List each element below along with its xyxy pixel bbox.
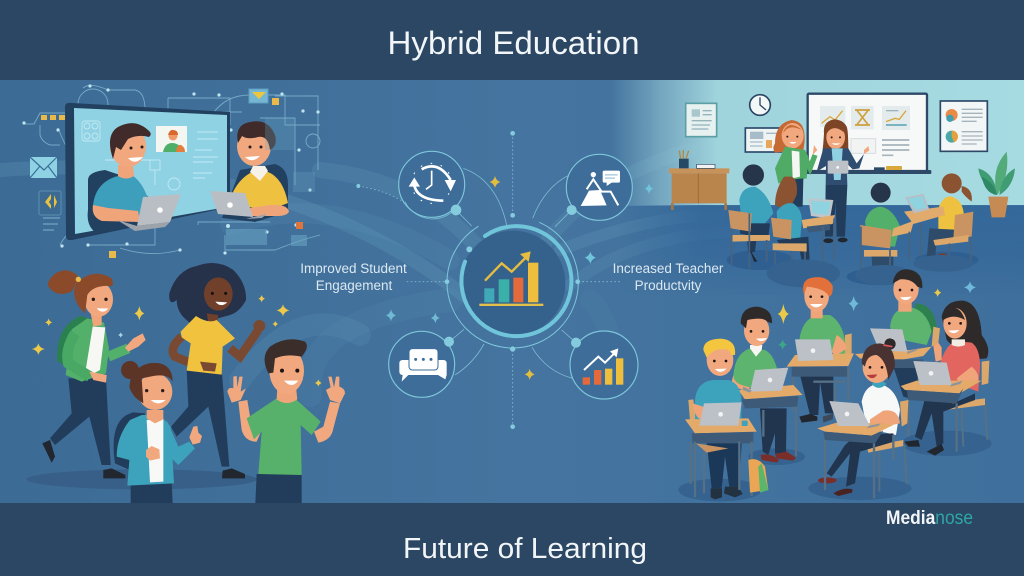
student B, dark hair and polo bbox=[732, 307, 803, 463]
student C, orange hair bbox=[787, 277, 854, 423]
icon: growth chart bbox=[570, 331, 638, 399]
floating UI panels bbox=[226, 118, 315, 246]
student F, long hair in red shirt bbox=[901, 301, 989, 456]
student D, back right with backpack bbox=[855, 269, 940, 400]
circuit decoration bbox=[24, 85, 320, 254]
ground shadow bbox=[26, 469, 257, 489]
teacher with tablet bbox=[817, 119, 869, 243]
icon: yellow message bbox=[249, 89, 268, 103]
wall chart poster bbox=[940, 101, 987, 151]
student at laptop, teal shirt bbox=[88, 123, 181, 232]
whiteboard bbox=[804, 94, 931, 174]
wall clock bbox=[750, 95, 770, 115]
tablet screen bbox=[65, 103, 230, 240]
teacher in green cardigan bbox=[773, 120, 817, 207]
title: Hybrid Education bbox=[388, 25, 640, 61]
background swirl bands bbox=[0, 150, 760, 395]
backpack on floor bbox=[748, 459, 768, 493]
icon: code badge bbox=[39, 191, 61, 230]
panel: classroom bbox=[669, 94, 1015, 285]
panel: central hub bbox=[356, 131, 653, 429]
seated student, teal shirt back view bbox=[727, 164, 793, 270]
label: increased teacher: Increased Teacher bbox=[613, 261, 724, 276]
student: ponytail girl in green jacket bbox=[42, 270, 146, 478]
icon: teacher presenting bbox=[566, 154, 632, 220]
background bbox=[0, 80, 1024, 504]
label: productvity: Productvity bbox=[635, 278, 702, 293]
student E, bun and white shirt bbox=[817, 338, 908, 498]
logo: Medianose: Medianose bbox=[886, 508, 973, 529]
hub outer ring bbox=[447, 217, 578, 348]
classroom floor bbox=[636, 205, 1024, 264]
potted plant bbox=[978, 152, 1015, 217]
student: girl with bun in teal jacket bbox=[114, 361, 202, 503]
seated student, green shirt back view bbox=[847, 183, 914, 285]
icon: clock cycle bbox=[399, 151, 465, 219]
student A, blond hair bbox=[685, 339, 757, 499]
panel: students at desks bbox=[678, 255, 992, 501]
panel: online learning bbox=[22, 84, 320, 258]
screen details bbox=[82, 121, 218, 190]
label: improved student: Improved Student bbox=[300, 261, 407, 276]
hub core bbox=[460, 231, 565, 336]
seated student, long hair with laptop bbox=[771, 177, 835, 280]
header bar bbox=[0, 0, 1024, 80]
coloured status squares bbox=[41, 98, 303, 258]
panel: happy students bbox=[26, 263, 345, 503]
small board bbox=[745, 128, 781, 152]
footer bar bbox=[0, 503, 1024, 576]
wall poster bbox=[686, 103, 717, 137]
sparkles bbox=[32, 295, 322, 387]
icon: mail envelope bbox=[30, 157, 57, 178]
circuit nodes bbox=[22, 84, 320, 255]
floor shadows bbox=[678, 255, 992, 501]
subtitle: Future of Learning bbox=[403, 533, 647, 565]
seated student, yellow shirt with ponytail bbox=[904, 173, 978, 272]
hub sparkles bbox=[386, 176, 653, 380]
student: man in green shirt waving bbox=[227, 339, 345, 503]
teacher desk bbox=[669, 150, 729, 210]
student: woman in yellow shirt bbox=[169, 263, 265, 478]
classroom sparkles bbox=[778, 281, 976, 350]
label: engagement: Engagement bbox=[316, 278, 393, 293]
hub connector lines bbox=[358, 133, 622, 427]
icon: chat bubbles bbox=[389, 331, 455, 397]
bar chart bbox=[479, 251, 543, 306]
classroom wall bbox=[610, 80, 1024, 206]
hub thick ring bbox=[461, 226, 571, 336]
student at laptop, yellow shirt bbox=[210, 121, 289, 222]
video call thumbnail bbox=[156, 126, 187, 152]
hub nodes bbox=[356, 131, 580, 429]
